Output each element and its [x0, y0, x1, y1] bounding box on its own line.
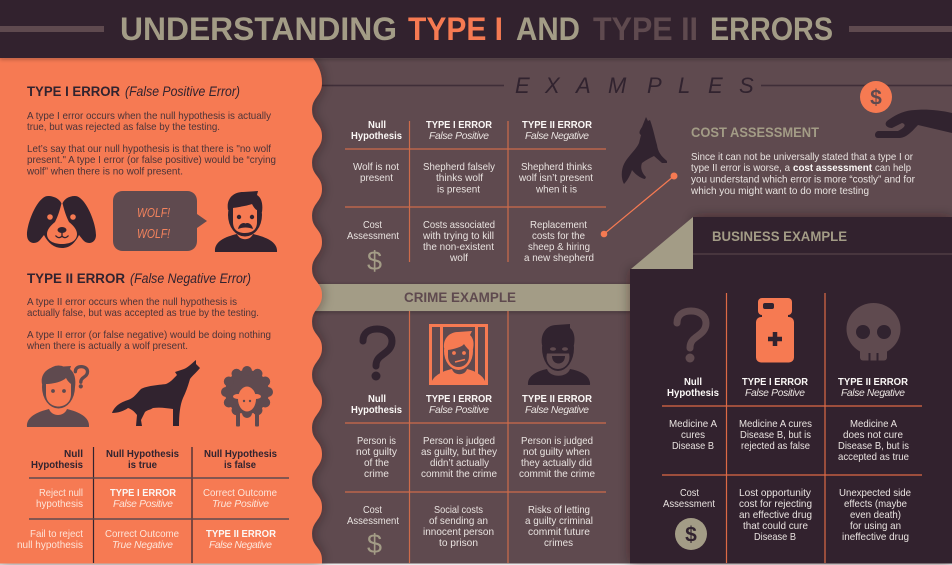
- business table row: null hypothesis: [669, 419, 909, 463]
- wolf table row: null hypothesis: when it is: [535, 184, 577, 196]
- wolf table row: null hypothesis: Wolf is not: [353, 162, 399, 173]
- business table headers: TYPE II ERROR: [838, 377, 909, 388]
- type II description: actually false, but was accepted as true by the testing.: [27, 308, 259, 319]
- crime table row: cost assessment: innocent person: [423, 527, 494, 538]
- cost assessment block: which you might want to do more testing: [690, 186, 869, 197]
- type I description: present." A type I error (or false positive) would be “crying: [27, 155, 276, 166]
- summary table row: fail to reject: null hypothesis: [17, 540, 83, 551]
- summary table row: fail to reject: True Negative: [112, 540, 173, 551]
- cost assessment block: type II error is worse, a: [691, 163, 790, 174]
- summary table headers: Null Hypothesis: [106, 449, 179, 460]
- examples heading: P: [647, 73, 662, 98]
- wolf table row: null hypothesis: Shepherd thinks: [521, 162, 592, 173]
- icon: coin: [860, 81, 892, 113]
- speech bubble: WOLF!: [137, 205, 170, 220]
- icon: hand: [875, 110, 952, 138]
- icon: howling wolf: [112, 360, 200, 426]
- cost assessment block: can help: [875, 163, 911, 174]
- business table row: null hypothesis: Disease B: [672, 441, 714, 452]
- icon: jailed person: [429, 324, 488, 385]
- crime table headers: False Negative: [525, 405, 589, 416]
- summary table headers: [31, 449, 277, 471]
- crime table row: cost assessment: of sending an: [429, 516, 488, 527]
- icon: question mark: [677, 311, 706, 362]
- folded corner: [631, 217, 693, 269]
- crime example band: [312, 284, 632, 311]
- business table row: cost assessment: cost for rejecting: [739, 499, 812, 510]
- examples heading: M: [608, 73, 627, 98]
- business table row: null hypothesis: rejected as false: [741, 441, 810, 452]
- crime table row: null hypothesis: crime: [364, 469, 389, 480]
- crime table row: cost assessment: commit future: [528, 527, 590, 538]
- wolf table headers: TYPE II ERROR: [522, 120, 593, 131]
- business table row: cost assessment: effects (maybe: [844, 499, 907, 510]
- wolf table row: cost assessment: the non-existent: [423, 242, 494, 253]
- business table row: null hypothesis: accepted as true: [838, 452, 909, 463]
- type I heading: (False Positive Error): [125, 83, 240, 99]
- type I description: [26, 111, 276, 178]
- title: ERRORS: [710, 11, 833, 47]
- summary table row: reject: Reject null: [39, 488, 83, 499]
- business table row: null hypothesis: Disease B, but is: [740, 430, 811, 441]
- business table row: cost assessment: an effective drug: [739, 510, 812, 521]
- summary table row: fail to reject: TYPE II ERROR: [206, 529, 277, 540]
- crime table row: cost assessment: crimes: [544, 538, 573, 549]
- business table row: null hypothesis: cures: [681, 430, 705, 441]
- summary table headers: is false: [224, 460, 256, 471]
- wolf table row: cost assessment: Replacement: [530, 220, 587, 231]
- icon: dollar coin: $: [685, 524, 697, 546]
- business table headers: Hypothesis: [667, 388, 719, 399]
- icon: question mark: [363, 329, 392, 380]
- business table row: cost assessment: [663, 488, 911, 543]
- cost assessment block: COST ASSESSMENT: [691, 125, 820, 140]
- business table row: cost assessment: Assessment: [663, 499, 715, 510]
- business table headers: False Negative: [841, 388, 905, 399]
- wolf table headers: Null: [368, 120, 386, 131]
- crime table row: null hypothesis: Person is judged: [521, 436, 593, 447]
- crime table headers: False Positive: [429, 405, 489, 416]
- type II heading: (False Negative Error): [130, 270, 251, 286]
- crime table headers: TYPE II ERROR: [522, 394, 593, 405]
- examples heading: S: [739, 73, 754, 98]
- business table row: cost assessment: for using an: [850, 521, 901, 532]
- type I description: true, but was rejected as false by the testing.: [27, 122, 220, 133]
- summary table headers: is true: [128, 460, 157, 471]
- type I description: wolf” when there is no wolf present.: [26, 166, 183, 178]
- wolf table row: null hypothesis: Shepherd falsely: [423, 162, 496, 173]
- summary table row: fail to reject: [17, 529, 277, 551]
- business table row: cost assessment: Lost opportunity: [739, 488, 812, 499]
- crime table row: null hypothesis: not guilty when: [523, 447, 590, 458]
- crime table row: null hypothesis: commit the crime: [519, 469, 595, 480]
- business table row: null hypothesis: Medicine A: [669, 419, 717, 430]
- icon: dollar sign: $: [367, 529, 382, 559]
- business table row: null hypothesis: Disease B, but is: [838, 441, 909, 452]
- business table headers: [667, 377, 909, 399]
- wolf table headers: TYPE I ERROR: [426, 120, 493, 131]
- wolf table row: cost assessment: costs for the: [532, 231, 585, 242]
- examples heading: [320, 73, 952, 98]
- business table headers: Null: [684, 377, 702, 388]
- speech bubble: WOLF!: [137, 226, 170, 241]
- wolf table row: null hypothesis: wolf isn’t present: [518, 173, 593, 184]
- examples heading: X: [544, 73, 561, 98]
- business table row: cost assessment: even death): [850, 510, 901, 521]
- type II description: A type II error (or false negative) would be doing nothing: [27, 330, 271, 341]
- examples heading: A: [574, 73, 591, 98]
- type II heading: TYPE II ERROR: [27, 271, 125, 286]
- icon: coyote: [622, 117, 667, 184]
- cost assessment block: you understand which error is more “costly” and for: [691, 174, 916, 186]
- cost assessment block: [690, 125, 916, 197]
- icon: masked criminal: [528, 324, 590, 385]
- type I description: Let’s say that our null hypothesis is that there is "no wolf: [27, 144, 271, 155]
- crime table row: null hypothesis: Person is: [357, 436, 396, 447]
- title: TYPE II: [593, 11, 698, 47]
- type II description: when there is actually a wolf present.: [26, 341, 188, 352]
- type II heading: [27, 270, 251, 286]
- crime table row: cost assessment: Assessment: [347, 516, 399, 527]
- summary table row: fail to reject: False Negative: [209, 540, 272, 551]
- summary table row: fail to reject: Correct Outcome: [105, 529, 179, 540]
- crime table row: null hypothesis: they actually did: [521, 458, 592, 469]
- crime table headers: [351, 394, 593, 416]
- crime table headers: Hypothesis: [351, 405, 402, 416]
- icon: shouting man: [215, 191, 277, 252]
- icon: sheep: [221, 366, 273, 426]
- crime table headers: Null: [368, 394, 386, 405]
- wolf table row: cost assessment: sheep & hiring: [528, 242, 590, 253]
- icon: coin: $: [870, 86, 882, 110]
- summary table row: reject: Correct Outcome: [203, 488, 277, 499]
- crime table row: null hypothesis: [356, 436, 595, 480]
- crime table row: null hypothesis: not guilty: [356, 447, 398, 458]
- summary table row: reject: False Positive: [113, 499, 173, 510]
- summary table row: reject: hypothesis: [36, 499, 83, 510]
- icon: unaware man: [27, 366, 89, 427]
- crime table row: cost assessment: Cost: [363, 505, 382, 516]
- business table row: cost assessment: Disease B: [754, 532, 796, 543]
- wolf table headers: Hypothesis: [351, 131, 402, 142]
- crime table row: cost assessment: to prison: [439, 538, 478, 549]
- crime table row: cost assessment: Risks of letting: [528, 505, 590, 516]
- summary table row: fail to reject: Fail to reject: [30, 529, 83, 540]
- wolf table row: cost assessment: with trying to kill: [422, 231, 494, 242]
- examples heading: E: [708, 73, 723, 98]
- crime table row: cost assessment: Social costs: [434, 505, 483, 516]
- title: UNDERSTANDING: [120, 11, 397, 47]
- panel: crime table: [345, 311, 606, 563]
- summary table row: reject: TYPE I ERROR: [110, 488, 177, 499]
- crime table row: cost assessment: a guilty criminal: [525, 516, 593, 527]
- icon: medicine bottle: [756, 298, 794, 362]
- wolf table row: null hypothesis: [353, 162, 593, 196]
- business table row: cost assessment: that could cure: [743, 521, 808, 532]
- crime table row: null hypothesis: as guilty, but they: [421, 447, 498, 458]
- wolf table row: null hypothesis: present: [360, 173, 393, 184]
- speech bubble: [113, 191, 207, 251]
- icon: dollar coin: [675, 518, 707, 550]
- panel: wolf examples table: [345, 120, 606, 276]
- panel: definitions: [0, 58, 322, 564]
- summary table headers: Null: [64, 449, 83, 460]
- wolf table row: cost assessment: Cost: [363, 220, 382, 231]
- cost assessment block: Since it can not be universally stated that a type I or: [691, 152, 914, 163]
- wolf table row: null hypothesis: is present: [437, 184, 480, 196]
- wolf table row: cost assessment: Costs associated: [423, 220, 495, 231]
- wolf table headers: False Positive: [429, 131, 489, 142]
- business table headers: TYPE I ERROR: [742, 377, 809, 388]
- wolf table row: null hypothesis: thinks wolf: [436, 173, 483, 184]
- wolf table headers: False Negative: [525, 131, 589, 142]
- icon: skull: [846, 303, 900, 361]
- crime table row: null hypothesis: Person is judged: [423, 436, 495, 447]
- summary table row: reject: [36, 488, 277, 510]
- title: [120, 11, 833, 47]
- crime table row: null hypothesis: commit the crime: [421, 469, 497, 480]
- business table row: cost assessment: ineffective drug: [842, 532, 909, 543]
- panel: business example: [630, 217, 952, 564]
- type I heading: [27, 83, 240, 99]
- connector line: [601, 172, 678, 237]
- type II description: A type II error occurs when the null hypothesis is: [27, 297, 237, 308]
- wolf table headers: [351, 120, 593, 142]
- icon: dog: [27, 196, 96, 248]
- business table headers: False Positive: [745, 388, 805, 399]
- icon: dollar sign: $: [367, 246, 382, 276]
- type I heading: TYPE I ERROR: [27, 84, 120, 99]
- title band: [0, 0, 952, 58]
- title: TYPE I: [408, 11, 503, 47]
- wolf table row: cost assessment: Assessment: [347, 231, 399, 242]
- business table row: null hypothesis: does not cure: [843, 430, 903, 441]
- business table row: cost assessment: Cost: [680, 488, 699, 499]
- summary table headers: Hypothesis: [31, 460, 83, 471]
- summary table row: reject: True Positive: [212, 499, 269, 510]
- crime table row: null hypothesis: of the: [364, 458, 389, 469]
- type I description: A type I error occurs when the null hypothesis is actually: [27, 111, 272, 122]
- examples heading: L: [678, 73, 690, 98]
- business table row: cost assessment: Unexpected side: [839, 488, 911, 499]
- summary table: [17, 447, 289, 563]
- title: AND: [516, 11, 580, 47]
- crime table headers: TYPE I ERROR: [426, 394, 493, 405]
- crime table row: cost assessment: [347, 505, 593, 549]
- crime example band: CRIME EXAMPLE: [404, 290, 516, 305]
- wolf table row: cost assessment: a new shepherd: [524, 253, 594, 264]
- type II description: [26, 297, 271, 352]
- wolf table row: cost assessment: [347, 220, 594, 264]
- business table row: null hypothesis: Medicine A: [850, 419, 897, 430]
- summary table headers: Null Hypothesis: [204, 449, 277, 460]
- cost assessment block: cost assessment: [793, 163, 873, 174]
- examples heading: E: [515, 73, 530, 98]
- wolf table row: cost assessment: wolf: [449, 253, 468, 264]
- business table row: null hypothesis: Medicine A cures: [739, 419, 812, 430]
- business heading: BUSINESS EXAMPLE: [712, 229, 847, 244]
- crime table row: null hypothesis: didn’t actually: [430, 458, 490, 469]
